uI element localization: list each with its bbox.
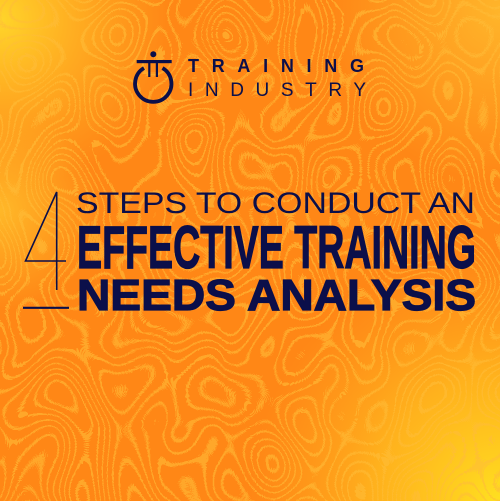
title line: needs analysis: NEEDS ANALYSIS bbox=[77, 271, 476, 320]
numeral 4 bbox=[23, 192, 69, 308]
logo wordmark: TRAINING: TRAINING bbox=[188, 56, 364, 76]
title bbox=[76, 187, 476, 320]
title line: steps to conduct an: STEPS TO CONDUCT AN bbox=[76, 187, 475, 220]
logo wordmark: INDUSTRY: INDUSTRY bbox=[188, 80, 366, 101]
logo: Training Industry bbox=[135, 51, 366, 102]
logo icon bbox=[135, 51, 172, 102]
